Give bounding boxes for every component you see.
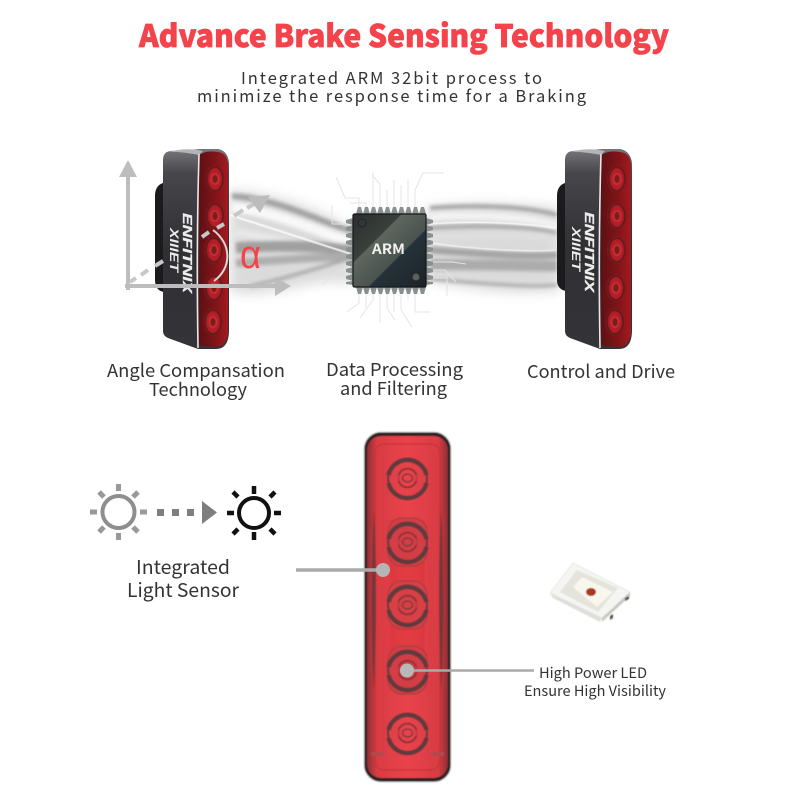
lens 3 (388, 581, 427, 629)
brand text (569, 212, 597, 294)
icon: LED chip (550, 563, 630, 622)
label: angle compensation (107, 357, 285, 402)
label: integrated light sensor: Light Sensor (127, 576, 240, 603)
icon: bright sun (227, 486, 281, 540)
lens 2 (388, 518, 427, 566)
angle axes overlay (119, 160, 291, 296)
callout: high power led (400, 664, 534, 678)
data cables between lights and chip (230, 190, 560, 293)
brand text: ENFITNIX (180, 213, 195, 295)
label: angle compensation: Technology (149, 376, 248, 402)
mount clip (557, 183, 566, 291)
callout: light sensor (296, 563, 390, 577)
housing (364, 432, 451, 782)
alpha symbol: α (240, 233, 261, 277)
label: integrated light sensor (127, 553, 240, 603)
label: high power led: High Power LED (539, 662, 647, 683)
lens rings (204, 166, 224, 335)
chrome edge (197, 154, 199, 348)
label: control and drive: Control and Drive (527, 358, 675, 384)
label: angle compensation: Angle Compansation (107, 357, 285, 383)
housing (163, 149, 229, 349)
lens 5 (388, 714, 427, 753)
centre channel (390, 520, 425, 690)
lens 4 (388, 646, 427, 694)
label: data processing: and Filtering (340, 375, 447, 401)
housing (565, 149, 632, 349)
mount clip (155, 183, 164, 292)
red lens (601, 151, 631, 347)
chrome edge (599, 154, 601, 348)
lens 1 (388, 458, 427, 498)
ARM chip (346, 207, 433, 294)
red lens face (367, 436, 448, 778)
label: data processing (326, 356, 463, 401)
right tail light, side view (557, 149, 632, 349)
label: data processing: Data Processing (326, 356, 463, 382)
label: integrated light sensor: Integrated (136, 553, 230, 580)
brand text (167, 213, 195, 295)
brand text: ENFITNIX (582, 212, 597, 294)
brand text: XIIIET (167, 227, 179, 273)
lens rings (606, 166, 626, 335)
ARM chip: ARM (371, 239, 405, 259)
label: high power led: Ensure High Visibility (524, 680, 666, 701)
subtitle: minimize the response time for a Braking (197, 83, 587, 107)
title: Advance Brake Sensing Technology (138, 11, 669, 56)
arrow: dim to bright (157, 501, 217, 524)
brand text: XIIIET (569, 226, 581, 272)
subtitle (197, 65, 587, 107)
large tail light, front view (364, 432, 451, 782)
label: high power led (524, 662, 666, 701)
icon: dim sun (90, 484, 147, 540)
red lens (199, 151, 228, 347)
left tail light, side view (155, 149, 229, 349)
side shading (371, 510, 444, 756)
subtitle: Integrated ARM 32bit process to (241, 65, 542, 89)
chip pins (346, 207, 433, 294)
chip circuit traces (322, 172, 466, 327)
